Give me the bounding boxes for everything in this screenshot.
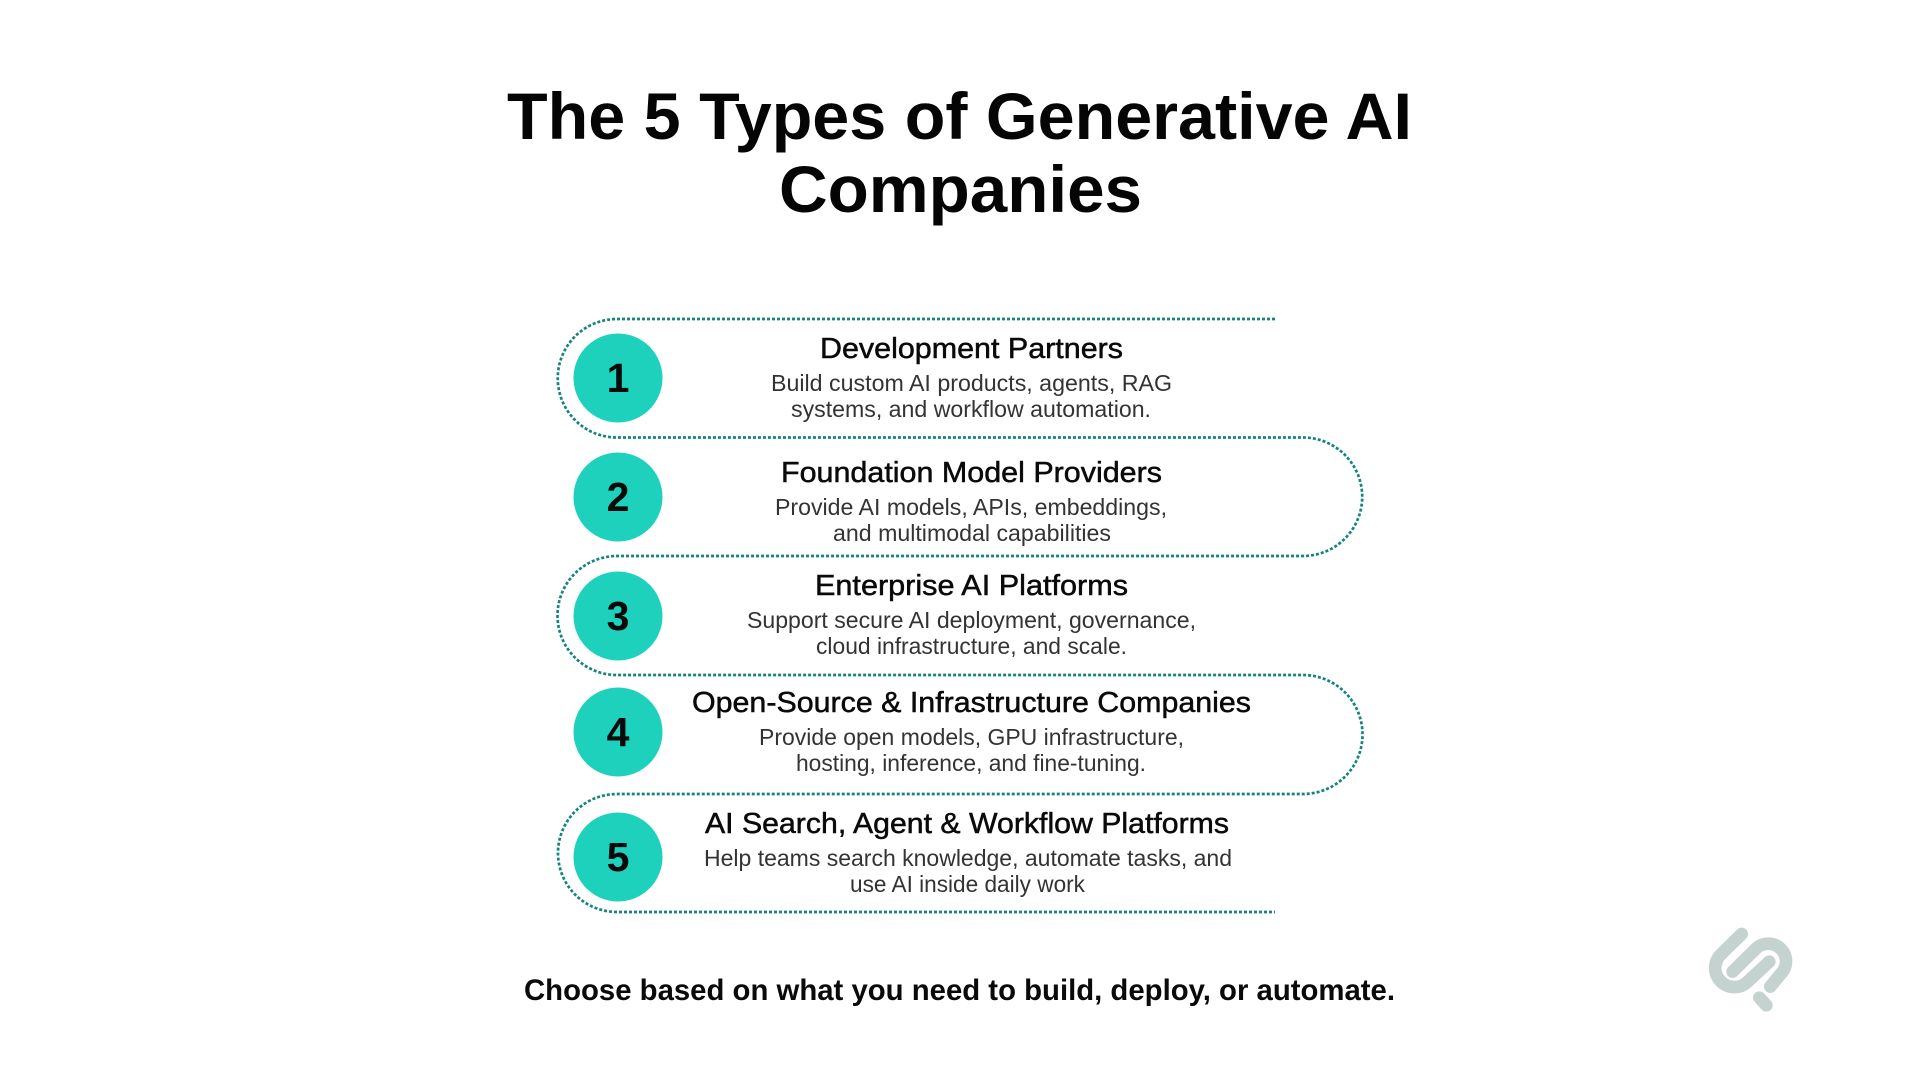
- description 5: Help teams search knowledge, automate tasks, and: [704, 845, 1232, 871]
- heading 2: Foundation Model Providers: [781, 457, 1162, 489]
- heading 1: Development Partners: [820, 333, 1123, 365]
- heading 5: AI Search, Agent & Workflow Platforms: [705, 808, 1229, 840]
- row 4: Open-Source & Infrastructure Companies: [574, 687, 1251, 776]
- number badge 4: 4: [607, 709, 630, 755]
- description 5: use AI inside daily work: [850, 871, 1085, 897]
- icon: watermark logo: [1715, 934, 1786, 1005]
- footer takeaway: Choose based on what you need to build, deploy, or automate.: [524, 974, 1395, 1007]
- description 4: Provide open models, GPU infrastructure,: [759, 724, 1184, 750]
- number badge 5: [574, 812, 662, 902]
- number badge 5: 5: [607, 834, 629, 880]
- number badge 1: [574, 334, 662, 422]
- title: Companies: [779, 152, 1142, 226]
- description 1: systems, and workflow automation.: [791, 396, 1151, 422]
- row 5: AI Search, Agent & Workflow Platforms: [574, 808, 1232, 902]
- row 1: Development Partners: [574, 333, 1172, 422]
- description 3: [747, 607, 1196, 659]
- description 4: [759, 724, 1184, 776]
- row 3: Enterprise AI Platforms: [574, 570, 1196, 660]
- description 2: [775, 494, 1167, 546]
- heading 4: Open-Source & Infrastructure Companies: [692, 687, 1251, 719]
- row 2: Foundation Model Providers: [574, 452, 1167, 546]
- number badge 1: 1: [607, 355, 629, 401]
- number badge 2: [574, 452, 662, 542]
- number badge 3: 3: [607, 593, 629, 639]
- description 2: Provide AI models, APIs, embeddings,: [775, 494, 1167, 520]
- description 1: [771, 370, 1172, 422]
- description 4: hosting, inference, and fine-tuning.: [796, 750, 1146, 776]
- title: [507, 79, 1412, 226]
- number badge 4: [574, 688, 662, 776]
- title: The 5 Types of Generative AI: [507, 79, 1412, 153]
- description 1: Build custom AI products, agents, RAG: [771, 370, 1172, 396]
- description 2: and multimodal capabilities: [833, 520, 1111, 546]
- number badge 2: 2: [607, 474, 629, 520]
- dotted serpentine path connecting the five rows: [558, 319, 1362, 912]
- number badge 3: [574, 572, 662, 660]
- description 3: cloud infrastructure, and scale.: [816, 633, 1127, 659]
- heading 3: Enterprise AI Platforms: [815, 570, 1128, 602]
- description 3: Support secure AI deployment, governance,: [747, 607, 1196, 633]
- description 5: [704, 845, 1232, 897]
